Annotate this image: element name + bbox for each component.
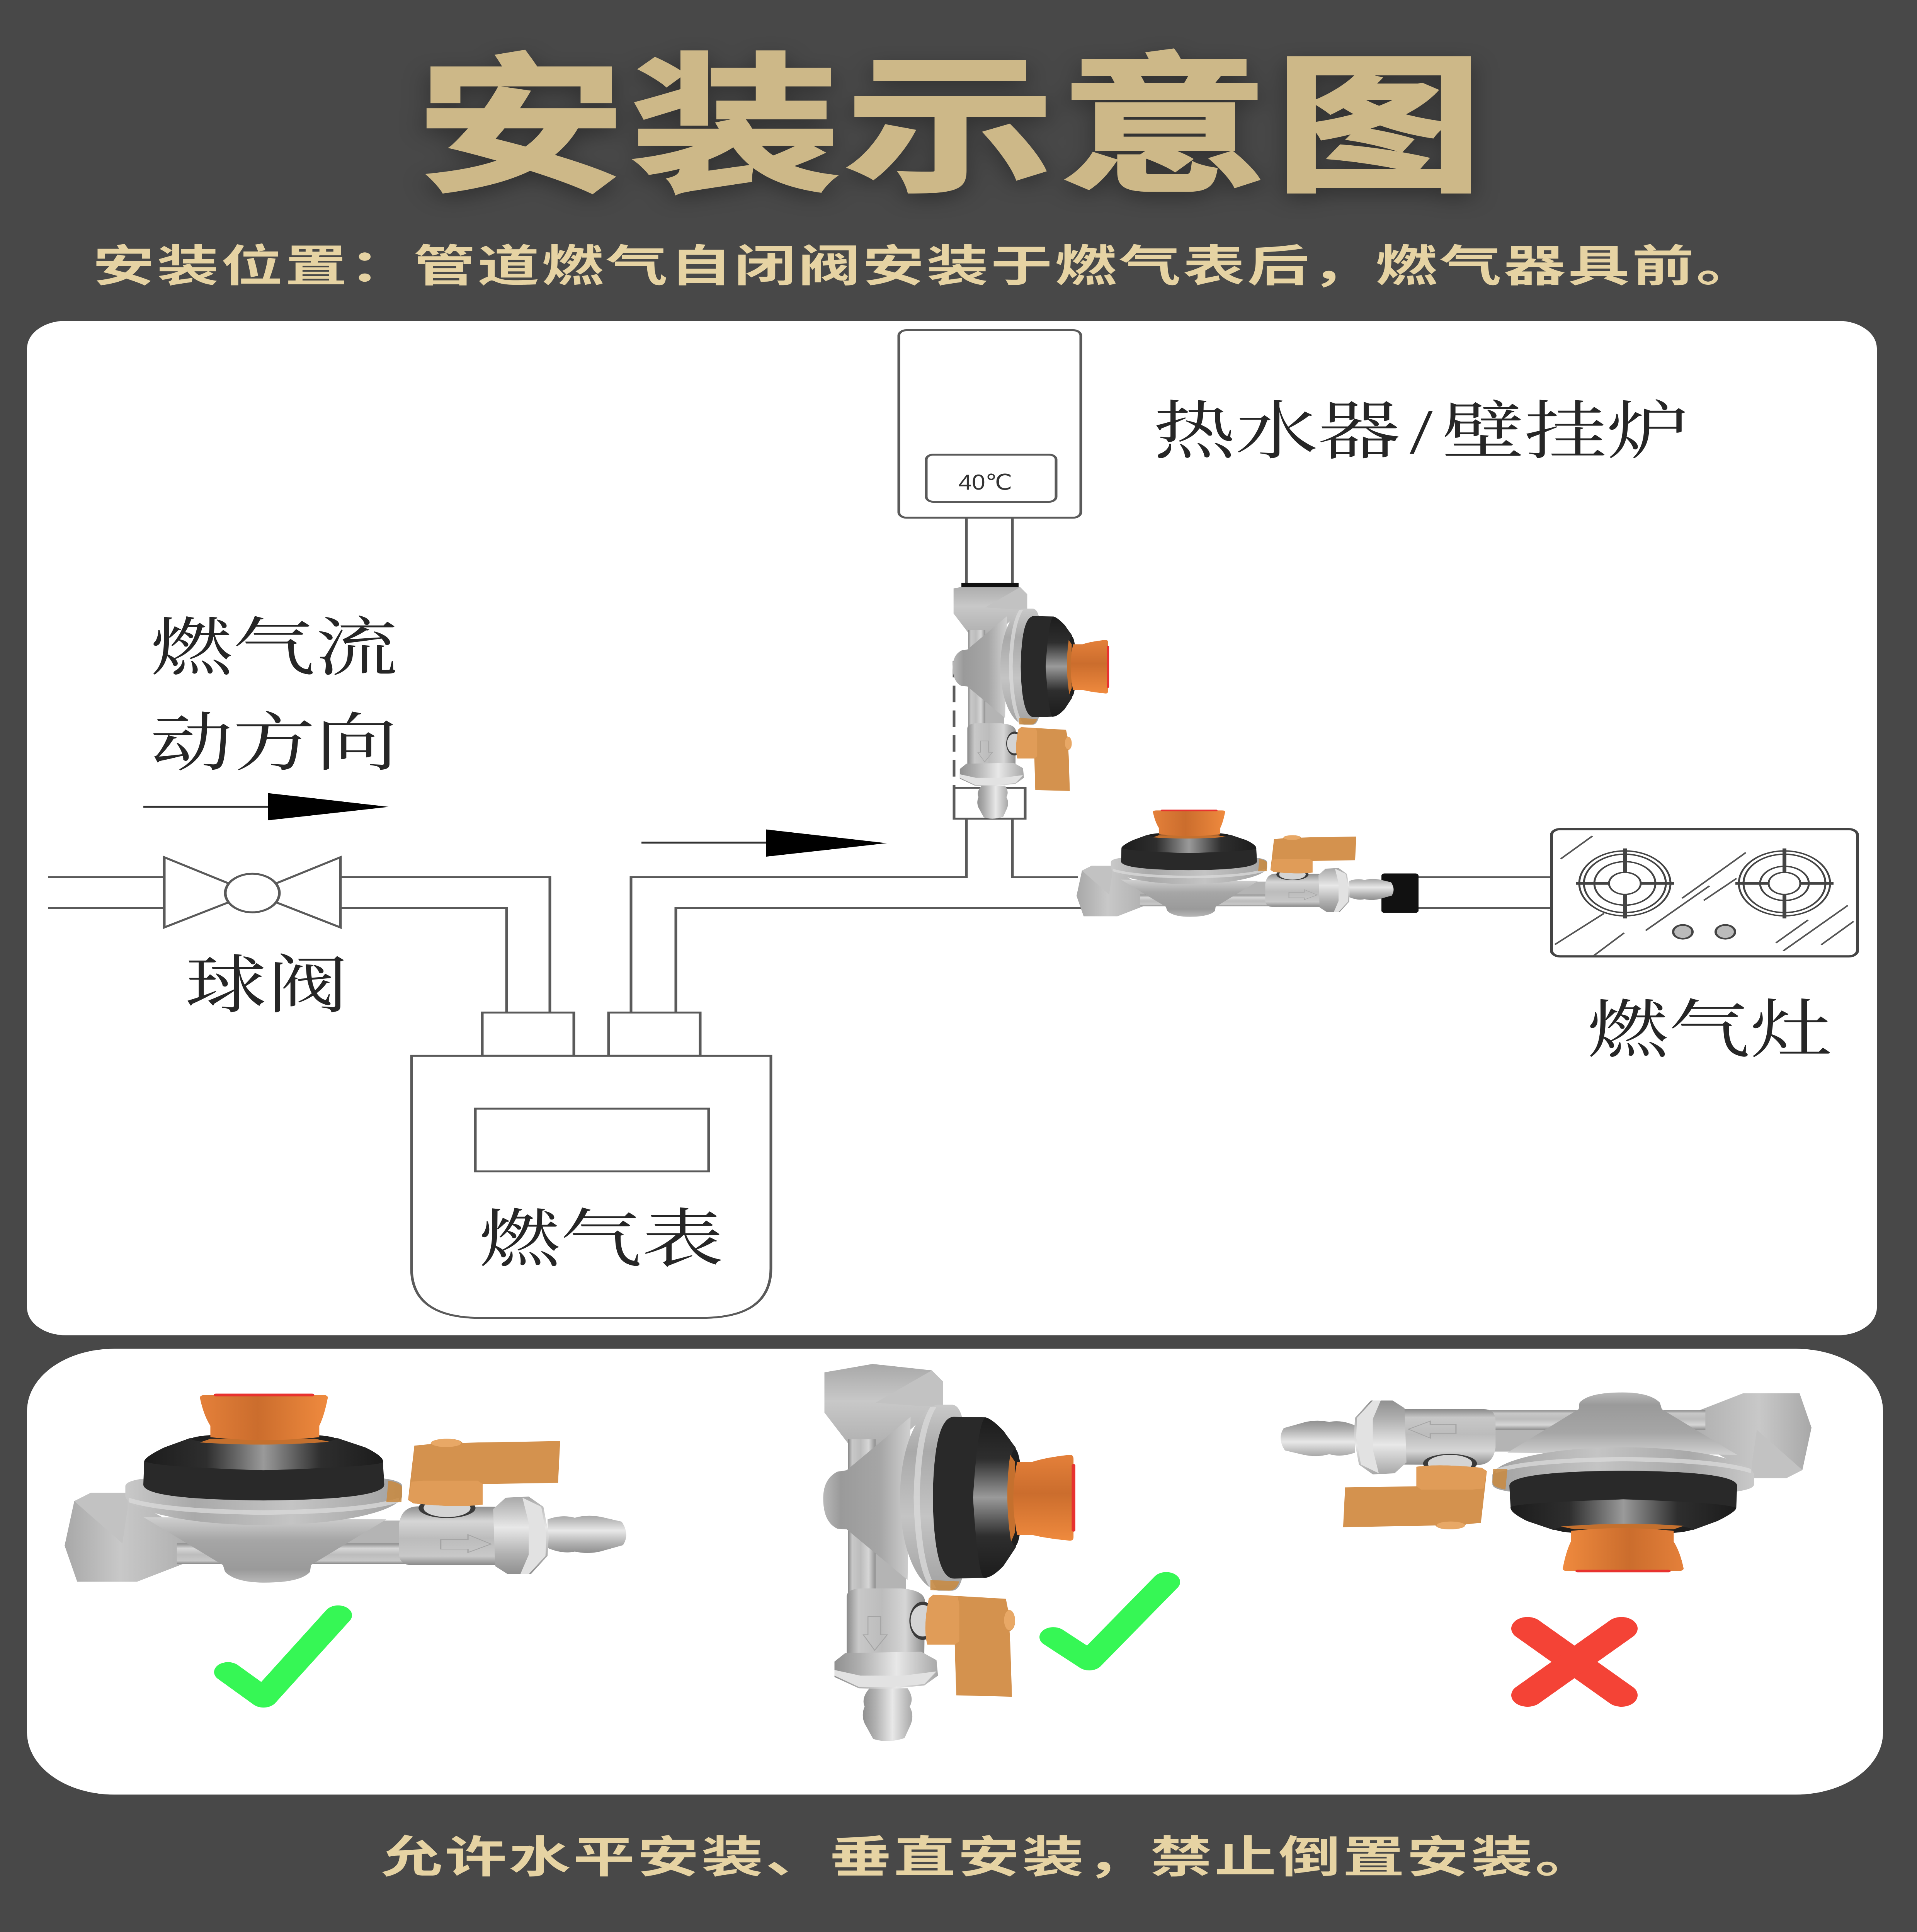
meter display [475, 1109, 709, 1172]
pipe network [48, 518, 1551, 1012]
label: gas flow direction: 燃气流 [150, 613, 398, 684]
product: valve installed horizontally on stove line [1077, 810, 1394, 917]
panel: installation location diagram [27, 321, 1877, 1335]
product: valve installed vertically on heater line [953, 583, 1109, 819]
label: gas flow direction: 动方向 [150, 708, 398, 779]
icon: check mark horizontal [228, 1615, 338, 1698]
icon: ball valve [164, 857, 340, 927]
heater temperature: 40℃ [958, 470, 1012, 494]
subtitle: installation location: 安装位置：管道燃气自闭阀安装于燃气表后，燃气器具前。 [93, 242, 1760, 291]
valve: inverted installation [1281, 1393, 1812, 1572]
gas meter [412, 1012, 771, 1318]
stove glass reflections [1555, 836, 1854, 956]
stove right burner [1735, 849, 1834, 918]
arrow: flow direction lower [641, 830, 887, 857]
panel: permitted and prohibited orientations [27, 1349, 1883, 1794]
icon: check mark vertical [1053, 1582, 1166, 1660]
stove left burner [1576, 849, 1674, 918]
stove knobs [1673, 925, 1735, 939]
icon: prohibited cross [1527, 1629, 1621, 1695]
label: gas flow direction [150, 613, 398, 779]
label: ball valve: 球阀 [185, 951, 348, 1022]
footer note: 允许水平安装、垂直安装，禁止倒置安装。 [381, 1833, 1599, 1882]
title: 安装示意图 [417, 44, 1489, 210]
heater or wall boiler unit [899, 330, 1081, 518]
gas stove [1551, 829, 1857, 956]
label: gas stove: 燃气灶 [1587, 995, 1832, 1066]
valve: horizontal installation [65, 1394, 626, 1583]
label: gas meter: 燃气表 [479, 1204, 723, 1276]
fitting: black collar above vertical valve [961, 583, 1019, 587]
meter connectors [482, 1012, 700, 1056]
label: water heater / wall boiler: 热水器/壁挂炉 [1153, 397, 1689, 467]
valve: vertical installation [823, 1364, 1075, 1741]
fitting: black connector [1381, 874, 1419, 913]
arrow: flow direction upper [143, 793, 389, 820]
heater display [926, 455, 1056, 502]
